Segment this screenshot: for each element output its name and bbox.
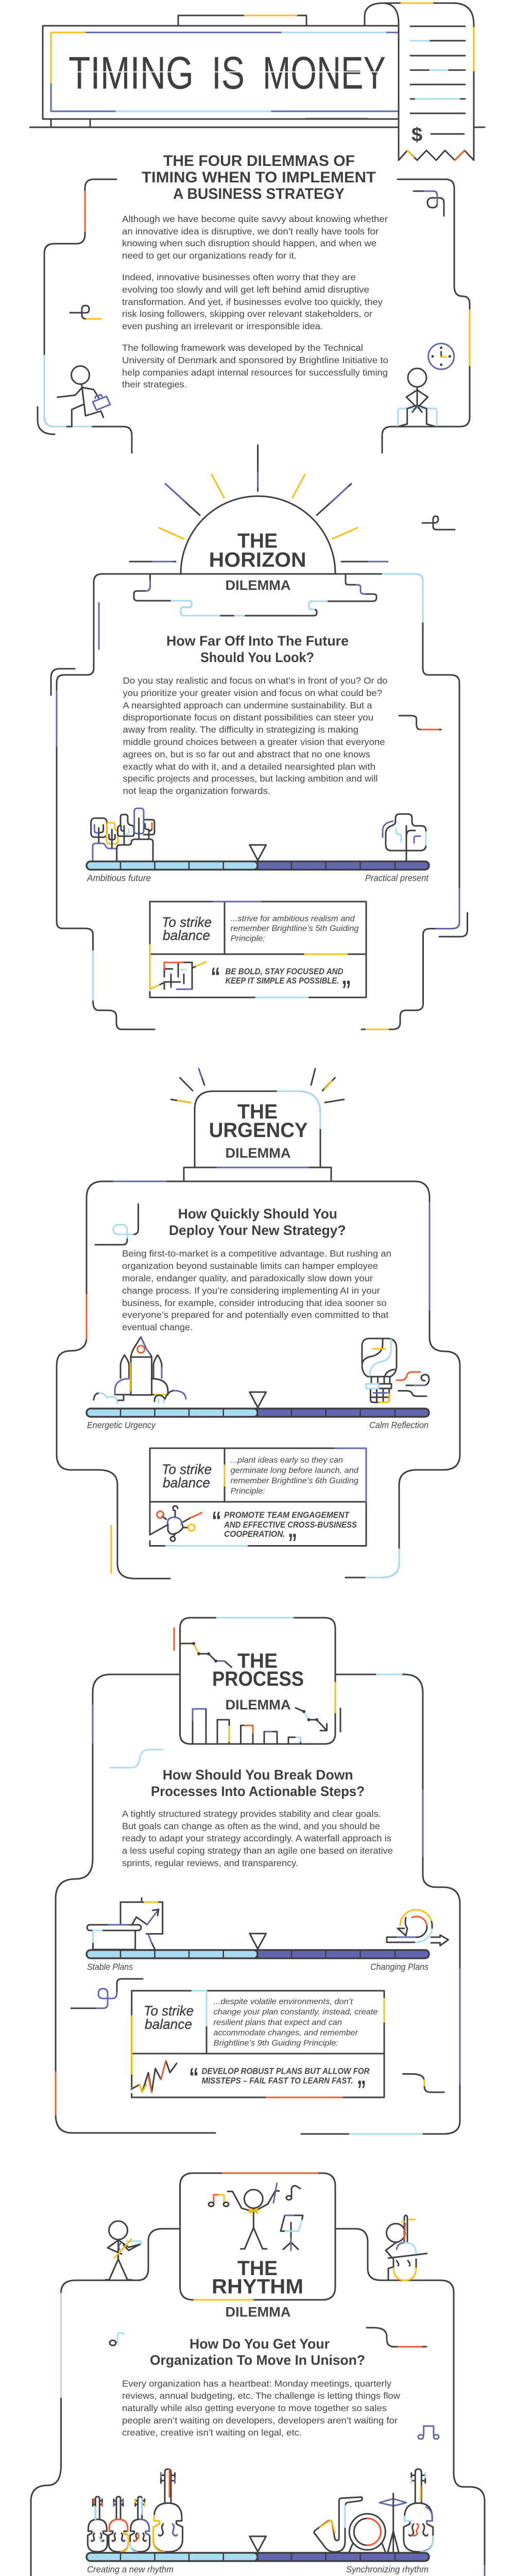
- question: horizon: Should You Look?: [200, 650, 314, 665]
- note text: remember Brightline’s 6th Guiding: [231, 1477, 358, 1485]
- pull quote: “: [212, 1506, 221, 1535]
- pull quote: PROMOTE TEAM ENGAGEMENT: [224, 1510, 350, 1520]
- large violin: [153, 2469, 182, 2552]
- pull quote: ”: [357, 2075, 366, 2104]
- body text: horizon: agrees on, but is so far out and abstract that no one knows: [123, 749, 370, 759]
- body text: urgency: change process. If you’re considering implementing AI in your: [122, 1285, 380, 1296]
- icon: maze: [160, 962, 206, 989]
- icon: rocket: [94, 1337, 186, 1403]
- heading: four dilemmas: TIMING WHEN TO IMPLEMENT: [142, 169, 376, 186]
- icon: conductor: [228, 2183, 279, 2249]
- pull quote: COOPERATION.: [224, 1529, 285, 1539]
- icon: saxophone: [314, 2497, 362, 2552]
- label: to strike balance: [162, 1462, 212, 1490]
- heading: the rhythm: RHYTHM: [212, 2275, 303, 2298]
- body text: urgency: morale, endanger quality, and paradoxically slow down your: [122, 1273, 373, 1283]
- heading: the urgency: URGENCY: [209, 1119, 308, 1142]
- violin 1: [88, 2497, 107, 2552]
- body text: process: A tightly structured strategy provides stability and clear goals.: [122, 1808, 381, 1819]
- intro text: Indeed, innovative businesses often worry that they are: [122, 272, 356, 282]
- heading: the process: PROCESS: [212, 1668, 304, 1690]
- note text: ...despite volatile environments, don’t: [213, 1997, 353, 2006]
- sun rays: [130, 445, 387, 562]
- icon: violin group: [88, 2469, 182, 2552]
- header: timing is money billboard: [30, 3, 485, 160]
- label: to strike balance: To strike: [162, 1462, 212, 1477]
- intro text: even pushing an irrelevant or irresponsible idea.: [122, 321, 323, 331]
- squiggle: top right: [414, 191, 444, 216]
- icon: violinist: [106, 2221, 141, 2280]
- body text: urgency: eventual change.: [122, 1322, 193, 1332]
- body text: urgency: business, for example, consider introducing that idea sooner so: [122, 1298, 387, 1308]
- body text: urgency: [122, 1248, 391, 1332]
- heading: four dilemmas: [142, 152, 376, 202]
- icon: hot air balloon: [362, 1338, 429, 1402]
- squiggles: horizon: [51, 516, 468, 937]
- note text: [231, 914, 359, 943]
- question: process: Processes Into Actionable Steps?: [151, 1784, 365, 1799]
- body text: rhythm: people aren’t waiting on developers, developers aren’t waiting for: [122, 2415, 398, 2426]
- pull quote: [189, 2063, 370, 2104]
- siren rays: [171, 1069, 344, 1103]
- body text: horizon: you prioritize your greater vision and focus on what could be?: [123, 688, 382, 698]
- intro text: knowing when such disruption should happen, and when we: [122, 238, 376, 248]
- pull quote: ”: [341, 975, 351, 1004]
- note text: germinate long before launch, and: [231, 1466, 359, 1475]
- note text: ...strive for ambitious realism and: [231, 914, 355, 923]
- receipt: [365, 3, 474, 160]
- icon: desk and chart board: [87, 1898, 163, 1950]
- pull quote: “: [189, 2063, 199, 2092]
- title: timing is money: IS: [212, 47, 245, 98]
- intro text: Although we have become quite savvy about knowing whether: [122, 214, 388, 224]
- body text: rhythm: naturally while also getting everyone to move together so sales: [122, 2403, 387, 2413]
- intro text: evolving too slowly and will get left behind amid disruptive: [122, 284, 369, 295]
- question: rhythm: Organization To Move In Unison?: [150, 2352, 365, 2368]
- heading: the process: [212, 1650, 304, 1713]
- body text: horizon: exactly what do with it, and a detailed nearsighted plan with: [123, 761, 375, 772]
- icon: looping arrow: [387, 1910, 448, 1945]
- icon: music notes: [209, 2186, 300, 2207]
- body text: rhythm: creative, creative isn’t waiting on legal, etc.: [122, 2428, 302, 2438]
- intro frame outline: [38, 179, 470, 453]
- process box: [174, 1618, 340, 1744]
- body text: rhythm: reviews, annual budgeting, etc. The challenge is letting things flow: [122, 2391, 400, 2401]
- note text: change your plan constantly, instead, create: [213, 2008, 378, 2016]
- receipt: $: [411, 124, 422, 146]
- intro text: [122, 214, 388, 389]
- slider: creating a new rhythm to synchronizing rhythm: Synchronizing rhythm: [346, 2564, 428, 2574]
- slider: energetic urgency to calm reflection: Energetic Urgency: [87, 1420, 156, 1430]
- icon: forest of trees on hills: [91, 808, 154, 860]
- pull quote: ”: [288, 1528, 297, 1557]
- slider: stable plans to changing plans: Changing Plans: [370, 1962, 428, 1972]
- heading: the horizon: [209, 530, 306, 593]
- body text: process: ready to adapt your strategy accordingly. A waterfall approach is: [122, 1833, 391, 1843]
- slider: stable plans to changing plans: [87, 1934, 429, 1972]
- heading: the urgency: DILEMMA: [226, 1145, 290, 1161]
- note text: [213, 1997, 378, 2047]
- note text: resilient plans that expect and can: [213, 2019, 342, 2027]
- icon: clock: [428, 344, 454, 369]
- to strike balance box: horizon: [150, 902, 366, 1004]
- intro text: their strategies.: [122, 379, 187, 389]
- heading: four dilemmas: A BUSINESS STRATEGY: [173, 185, 345, 202]
- to strike balance box: process: [131, 1991, 384, 2104]
- body text: horizon: Do you stay realistic and focus on what’s in front of you? Or do: [123, 675, 387, 686]
- violin 2: [109, 2497, 128, 2552]
- slider: creating a new rhythm to synchronizing rhythm: Creating a new rhythm: [87, 2564, 174, 2574]
- body text: urgency: Being first-to-market is a competitive advantage. But rushing an: [122, 1248, 391, 1259]
- body text: horizon: specific projects and processes, but lacking ambition and will: [123, 773, 378, 784]
- icon: cymbal: [380, 2494, 406, 2552]
- body text: horizon: [123, 675, 387, 796]
- question: horizon: [166, 633, 349, 665]
- title: timing is money: TIMING: [68, 47, 194, 98]
- pull quote: [211, 962, 351, 1004]
- question: horizon: How Far Off Into The Future: [166, 633, 349, 649]
- note text: Principle:: [231, 1487, 265, 1496]
- icon: cellist: [386, 2215, 427, 2280]
- heading: the process: DILEMMA: [226, 1697, 290, 1713]
- panel outline: process: [56, 1674, 460, 2134]
- intro panel: the four dilemmas: [38, 152, 470, 453]
- slider: stable plans to changing plans: Stable Plans: [87, 1962, 133, 1972]
- intro text: help companies adapt internal resources for successfully timing: [122, 367, 388, 378]
- slider: ambitious future to practical present: Practical present: [365, 873, 429, 883]
- squiggles: process: [71, 1750, 444, 2092]
- sun dome: [181, 496, 335, 573]
- intro text: University of Denmark and sponsored by Brightline Initiative to: [122, 355, 388, 365]
- pull quote: DEVELOP ROBUST PLANS BUT ALLOW FOR: [202, 2066, 370, 2076]
- slider: energetic urgency to calm reflection: [87, 1392, 429, 1430]
- body text: process: sprints, regular reviews, and transparency.: [122, 1858, 298, 1868]
- pull quote: AND EFFECTIVE CROSS-BUSINESS: [224, 1520, 357, 1530]
- label: to strike balance: balance: [163, 927, 210, 943]
- label: to strike balance: balance: [163, 1475, 210, 1490]
- body text: horizon: A nearsighted approach can undermine sustainability. But a: [123, 700, 372, 710]
- question: process: How Should You Break Down: [163, 1767, 353, 1783]
- pull quote: [212, 1506, 357, 1557]
- body text: process: [122, 1808, 393, 1868]
- slider: energetic urgency to calm reflection: Calm Reflection: [369, 1420, 428, 1430]
- heading: the horizon: DILEMMA: [226, 578, 290, 593]
- icon: zigzag pulse: [131, 2061, 177, 2092]
- section: the process dilemma: [56, 1618, 460, 2134]
- squiggles and notes: rhythm: [110, 2328, 439, 2439]
- body text: horizon: middle ground choices between a greater vision that everyone: [123, 737, 385, 747]
- heading: the process: THE: [237, 1650, 278, 1672]
- icon: music stand: [281, 2215, 303, 2250]
- title: timing is money: MONEY: [263, 47, 386, 98]
- question: rhythm: [150, 2336, 365, 2368]
- section: the rhythm dilemma: [31, 2173, 485, 2576]
- body text: horizon: away from reality. The difficulty in strategizing is making: [123, 724, 358, 735]
- body text: horizon: not leap the organization forwards.: [123, 786, 270, 796]
- intro text: need to get our organizations ready for it.: [122, 250, 297, 261]
- slider: creating a new rhythm to synchronizing rhythm: [87, 2536, 429, 2574]
- title: timing is money: [68, 47, 386, 98]
- icon: running man with briefcase: [58, 366, 110, 427]
- body text: urgency: everyone’s prepared for and potentially even committed to that: [122, 1310, 389, 1320]
- label: to strike balance: [144, 2003, 194, 2032]
- heading: the rhythm: DILEMMA: [226, 2304, 290, 2319]
- label: to strike balance: To strike: [144, 2003, 194, 2019]
- body text: rhythm: Every organization has a heartbeat: Monday meetings, quarterly: [122, 2379, 391, 2389]
- label: to strike balance: balance: [145, 2016, 192, 2032]
- question: urgency: Deploy Your New Strategy?: [169, 1223, 346, 1238]
- intro text: The following framework was developed by the Technical: [122, 343, 363, 353]
- pull quote: BE BOLD, STAY FOCUSED AND: [226, 967, 343, 976]
- icon: seated man: [398, 368, 437, 426]
- body text: urgency: organization beyond sustainable limits can hamper employee: [122, 1261, 378, 1271]
- squiggle: urgency: [95, 1204, 138, 1245]
- icon: drum: [349, 2514, 385, 2552]
- siren dome: [184, 1091, 331, 1181]
- note text: Brightline’s 9th Guiding Principle:: [213, 2039, 338, 2047]
- body text: process: But goals can change as often as the wind, and you should be: [122, 1821, 380, 1831]
- body text: rhythm: [122, 2379, 400, 2438]
- question: urgency: How Quickly Should You: [178, 1206, 337, 1222]
- label: to strike balance: To strike: [162, 914, 212, 930]
- heading: the urgency: [209, 1100, 308, 1161]
- body text: process: a less useful coping strategy than an agile one based on iterative: [122, 1845, 393, 1856]
- heading: four dilemmas: THE FOUR DILEMMAS OF: [163, 152, 355, 170]
- note text: remember Brightline’s 5th Guiding: [231, 924, 359, 933]
- icon: single practical tree: [383, 814, 426, 860]
- slider: ambitious future to practical present: [87, 845, 429, 883]
- violin 3: [130, 2497, 150, 2552]
- note text: accommodate changes, and remember: [213, 2029, 358, 2037]
- body text: horizon: disproportionate focus on distant possibilities can steer you: [123, 712, 373, 722]
- heading: the urgency: THE: [237, 1100, 278, 1123]
- heading: the horizon: HORIZON: [209, 549, 306, 571]
- descending line chart: [180, 1643, 327, 1731]
- question: urgency: [169, 1206, 346, 1238]
- descending bars: [193, 1709, 301, 1744]
- label: to strike balance: [162, 914, 212, 943]
- billboard frame: [30, 15, 485, 127]
- note text: ...plant ideas early so they can: [231, 1456, 343, 1465]
- to strike balance box: urgency: [150, 1448, 366, 1557]
- panel outline: horizon: [57, 574, 459, 1029]
- icon: large cello: [404, 2469, 433, 2552]
- heading: the rhythm: [212, 2257, 303, 2319]
- intro text: an innovative idea is disruptive, we don’t really have tools for: [122, 226, 379, 236]
- rhythm box: [180, 2173, 335, 2300]
- section: the horizon dilemma: [51, 445, 468, 1029]
- note text: [231, 1456, 359, 1496]
- pull quote: “: [211, 962, 220, 991]
- pull quote: KEEP IT SIMPLE AS POSSIBLE.: [226, 976, 339, 986]
- note text: Principle:: [231, 935, 265, 943]
- section: the urgency dilemma: [57, 1069, 460, 1579]
- intro text: risk losing followers, skipping over relevant stakeholders, or: [122, 309, 372, 319]
- heading: the rhythm: THE: [237, 2257, 278, 2280]
- slider: ambitious future to practical present: Ambitious future: [87, 873, 151, 883]
- question: process: [151, 1767, 365, 1799]
- squiggle: left: [70, 306, 101, 319]
- icon: hand with connected nodes: [150, 1506, 202, 1541]
- panel outline: rhythm: [31, 2229, 485, 2576]
- heading: the horizon: THE: [237, 530, 278, 552]
- question: rhythm: How Do You Get Your: [190, 2336, 330, 2352]
- panel outline: urgency: [57, 1181, 460, 1579]
- intro text: transformation. And yet, if businesses evolve too quickly, they: [122, 297, 383, 307]
- pull quote: MISSTEPS – FAIL FAST TO LEARN FAST.: [202, 2076, 353, 2086]
